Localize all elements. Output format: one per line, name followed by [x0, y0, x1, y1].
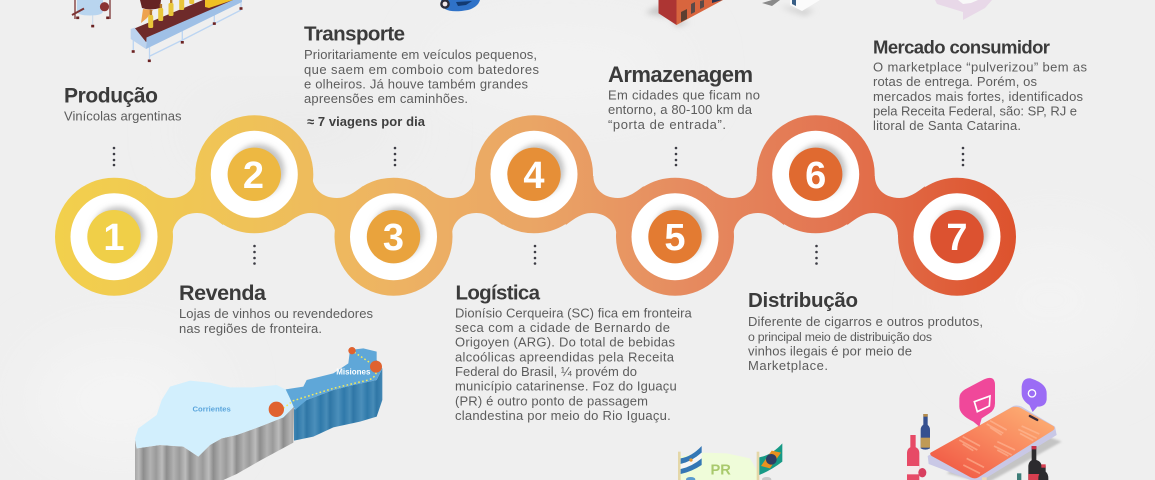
step 4 text: Logística — [455, 281, 692, 423]
Paraná map — [680, 453, 757, 480]
illustration: warehouse buildings — [645, 0, 820, 27]
illustration: pink map of consumer market — [935, 0, 992, 20]
step 7 text: Mercado consumidor: rotas de entrega. Porém, os — [873, 74, 1038, 89]
step marker 7 — [914, 193, 1000, 280]
step 4 text: Logística: Federal do Brasil, ¼ provém do — [455, 364, 637, 379]
phone screen — [930, 407, 1055, 478]
step 7 text: Mercado consumidor: mercados mais fortes, identificados — [873, 89, 1084, 104]
step 3 text: Transporte: que saem em comboio com batedores — [304, 62, 540, 77]
step 6 text: Distribução: o principal meio de distribuição dos — [748, 330, 932, 344]
step 4 text: Logística: (PR) é outro ponto de passagem — [455, 393, 648, 408]
route markers — [269, 347, 382, 417]
illustration: PR border with flags — [678, 443, 782, 480]
step 4 text: Logística: Logística — [456, 281, 541, 304]
step 3 text: Transporte: ≈ 7 viagens por dia — [307, 114, 426, 129]
step 7 text: Mercado consumidor: O marketplace “pulverizou” bem as — [873, 60, 1088, 75]
step 6 text: Distribução: Diferente de cigarros e outros produtos, — [748, 314, 983, 329]
step 4 text: Logística: Dionísio Cerqueira (SC) fica em fronteira — [455, 305, 692, 320]
step marker 7: 7 — [946, 217, 968, 259]
step 7 text: Mercado consumidor: pela Receita Federal, são: SP, RJ e — [873, 104, 1077, 119]
step 4 text: Logística: clandestina por meio do Rio Iguaçu. — [455, 408, 671, 423]
smuggling route — [283, 351, 376, 408]
illustration: bottling conveyor — [131, 0, 242, 62]
phone body — [928, 405, 1057, 480]
step 5 text: Armazenagem — [608, 62, 760, 132]
step 4 text: Logística: alcoólicas apreendidas pela Receita — [455, 349, 675, 364]
map: Corrientes and Misiones — [135, 347, 382, 480]
step 3 text: Transporte: Prioritariamente em veículos pequenos, — [304, 47, 537, 62]
step 2 text: Revenda: nas regiões de fronteira. — [179, 321, 322, 336]
step 4 text: Logística: Origoyen (ARG). Do total de bebidas — [455, 335, 676, 350]
step 3 text: Transporte: Transporte — [304, 23, 405, 46]
step 6 text: Distribução: Marketplace. — [748, 358, 828, 373]
step marker 5: 5 — [664, 217, 686, 259]
step marker 5 — [632, 193, 718, 280]
step marker 2 — [211, 131, 298, 218]
step 2 text: Revenda — [179, 281, 374, 336]
step 5 text: Armazenagem: entorno, a 80-100 km da — [608, 102, 753, 117]
step 6 text: Distribução — [748, 289, 983, 373]
flag: Brazil — [757, 443, 782, 480]
step 3 text: Transporte: apreensões em caminhões. — [304, 91, 468, 106]
step 5 text: Armazenagem: Em cidades que ficam no — [608, 88, 760, 102]
flag: Argentina — [678, 446, 702, 480]
step 3 text: Transporte — [304, 23, 540, 129]
illustration: phone marketplace with wine bottles — [907, 378, 1062, 480]
screen content — [959, 421, 1039, 473]
step marker 1 — [70, 193, 158, 280]
timeline ribbon — [50, 110, 1020, 300]
map side: Misiones wall — [294, 368, 382, 441]
step 1 text: Produção: Produção — [64, 84, 158, 108]
bubble: shopping basket — [959, 378, 995, 427]
step 6 text: Distribução: vinhos ilegais é por meio de — [748, 344, 912, 358]
step 3 text: Transporte: e olheiros. Já houve também grandes — [304, 76, 528, 92]
step 7 text: Mercado consumidor — [873, 36, 1088, 133]
label: Corrientes: Corrientes — [193, 404, 231, 413]
step 5 text: Armazenagem: Armazenagem — [608, 62, 753, 87]
step 7 text: Mercado consumidor: litoral de Santa Catarina. — [873, 118, 1021, 133]
step marker 6: 6 — [805, 155, 826, 197]
step 1 text: Produção — [64, 84, 182, 124]
step 5 text: Armazenagem: “porta de entrada”. — [608, 117, 726, 132]
bubble: search — [1022, 378, 1047, 412]
map side: Corrientes wall — [135, 407, 294, 480]
step 4 text: Logística: seca com a cidade de Bernardo de — [455, 320, 670, 335]
step 1 text: Produção: Vinícolas argentinas — [64, 109, 182, 124]
step marker 4 — [490, 131, 578, 218]
step marker 3: 3 — [383, 217, 404, 259]
illustration: wine tank — [72, 0, 110, 27]
step 2 text: Revenda: Lojas de vinhos ou revendedores — [179, 306, 374, 321]
bottle: rosé — [907, 435, 926, 480]
step marker 1: 1 — [103, 217, 125, 259]
step 7 text: Mercado consumidor: Mercado consumidor — [873, 36, 1050, 58]
label: PR: PR — [710, 462, 731, 478]
dotted leader lines — [113, 147, 964, 265]
step 2 text: Revenda: Revenda — [179, 281, 267, 305]
bottle: blue — [921, 414, 930, 450]
illustration: car — [440, 0, 480, 11]
label: Misiones: Misiones — [336, 368, 371, 377]
step 6 text: Distribução: Distribução — [748, 289, 858, 312]
step marker 4: 4 — [523, 155, 545, 197]
step marker 3 — [350, 193, 437, 280]
bottle: dark small — [1038, 466, 1048, 480]
step marker 6 — [772, 131, 859, 218]
map top: Misiones — [286, 348, 382, 410]
bottle: dark wine — [1028, 446, 1042, 480]
map top: Corrientes — [135, 381, 294, 457]
step 4 text: Logística: município catarinense. Foz do Iguaçu — [455, 379, 677, 394]
step marker 2: 2 — [243, 155, 264, 197]
